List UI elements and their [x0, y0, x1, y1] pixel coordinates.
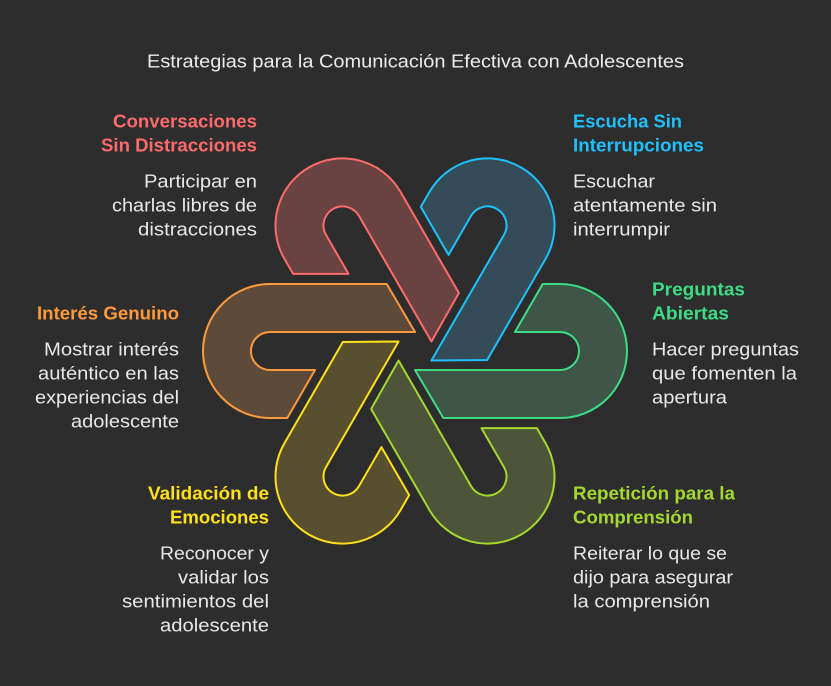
text block: preguntas abiertas: Abiertas	[652, 304, 729, 324]
text block: interés genuino: Interés Genuino	[37, 304, 179, 324]
text block: conversaciones sin distracciones: Sin Distracciones	[101, 136, 257, 156]
text block: conversaciones sin distracciones: Conversaciones	[113, 112, 257, 132]
title: Estrategias para la Comunicación Efectiva con Adolescentes	[147, 52, 684, 72]
text block: escucha sin interrupciones: interrumpir	[573, 220, 670, 240]
text block: conversaciones sin distracciones: distracciones	[138, 220, 257, 240]
text block: escucha sin interrupciones: Interrupciones	[573, 136, 704, 156]
text block: escucha sin interrupciones	[573, 112, 717, 240]
text block: conversaciones sin distracciones: charlas libres de	[112, 196, 257, 216]
text block: preguntas abiertas: Hacer preguntas	[652, 340, 799, 360]
text block: validación de emociones: Reconocer y	[160, 544, 269, 564]
link shape: escucha sin interrupciones (blue)	[357, 134, 579, 384]
text block: escucha sin interrupciones: Escucha Sin	[573, 112, 682, 132]
text block: interés genuino: experiencias del	[35, 388, 179, 408]
text block: conversaciones sin distracciones	[101, 112, 257, 240]
link shape: interés genuino (orange)	[203, 284, 415, 418]
text block: interés genuino	[35, 304, 179, 432]
text block: preguntas abiertas: que fomenten la	[652, 364, 798, 384]
text block: preguntas abiertas: apertura	[652, 388, 728, 408]
link shape: conversaciones sin distracciones (red)	[251, 134, 473, 384]
text block: preguntas abiertas: Preguntas	[652, 280, 745, 300]
text block: validación de emociones: Emociones	[170, 508, 269, 528]
text block: interés genuino: auténtico en las	[38, 364, 179, 384]
text block: interés genuino: Mostrar interés	[44, 340, 179, 360]
text block: repetición para la comprensión: dijo para asegurar	[573, 568, 733, 588]
text block: repetición para la comprensión: la comprensión	[573, 592, 710, 612]
text block: repetición para la comprensión	[573, 484, 736, 612]
link shape: preguntas abiertas (green)	[415, 284, 627, 418]
text block: preguntas abiertas	[652, 280, 799, 408]
text block: escucha sin interrupciones: atentamente sin	[573, 196, 717, 216]
text block: validación de emociones: validar los	[178, 568, 269, 588]
link shape: repetición para la comprensión (lime)	[357, 318, 579, 568]
text block: escucha sin interrupciones: Escuchar	[573, 172, 655, 192]
text block: validación de emociones: adolescente	[160, 616, 269, 636]
text block: validación de emociones	[122, 484, 269, 636]
text block: repetición para la comprensión: Reiterar lo que se	[573, 544, 727, 564]
text block: interés genuino: adolescente	[71, 412, 179, 432]
text block: validación de emociones: Validación de	[148, 484, 269, 504]
link shape: validación de emociones (yellow)	[251, 318, 473, 568]
text block: repetición para la comprensión: Comprensión	[573, 508, 693, 528]
text block: repetición para la comprensión: Repetición para la	[573, 484, 736, 504]
text block: conversaciones sin distracciones: Participar en	[144, 172, 257, 192]
text block: validación de emociones: sentimientos del	[122, 592, 269, 612]
